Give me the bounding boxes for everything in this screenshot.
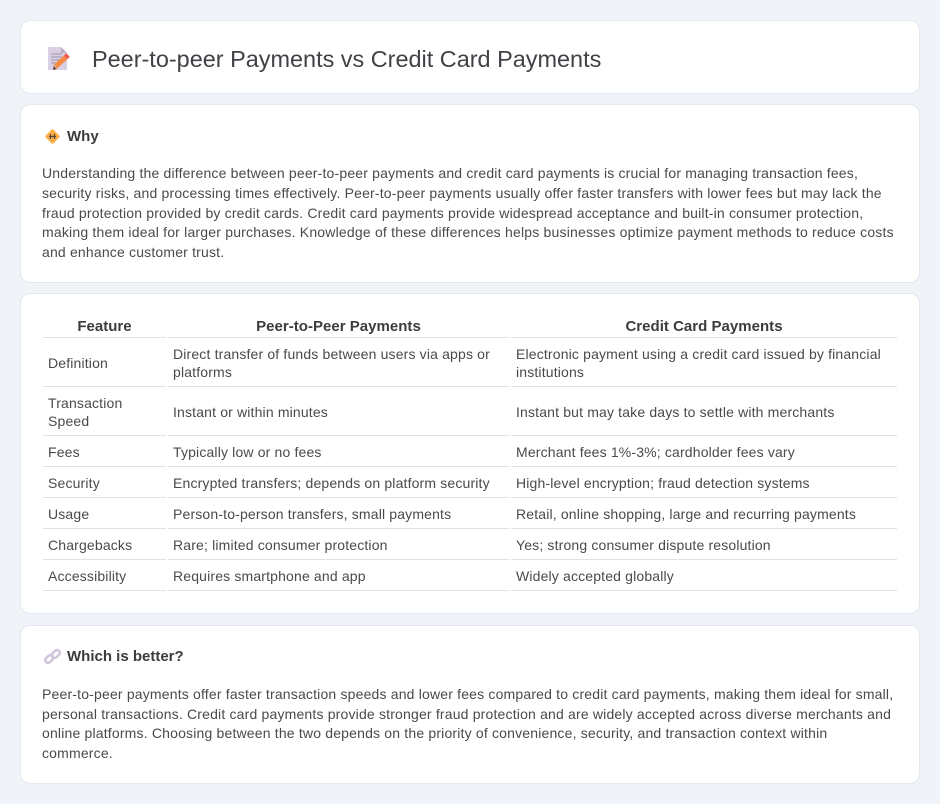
panel: comparison table bbox=[20, 293, 920, 614]
row: definition: Electronic payment using a credit card issued by financial bbox=[516, 346, 881, 362]
icon: chain link bbox=[44, 648, 61, 664]
row: accessibility: Requires smartphone and app bbox=[173, 568, 366, 584]
text block: which is better paragraph: online platforms. Choosing between the two depends on the priority of convenience, security, and transaction context within bbox=[42, 725, 827, 741]
heading: why: Why bbox=[67, 128, 99, 145]
text block: why paragraph bbox=[42, 165, 894, 260]
row: transaction speed: Instant but may take days to settle with merchants bbox=[516, 404, 834, 420]
icon: document with pencil bbox=[48, 47, 70, 70]
text block: which is better paragraph: personal transactions. Credit card payments provide stronger fraud protection and are widely accepted across diverse merchants and bbox=[42, 706, 891, 722]
text block: why paragraph: fraud protection provided by credit cards. Credit card payments provide widespread acceptance and built-in consumer protection, bbox=[42, 205, 863, 221]
row: fees: Merchant fees 1%-3%; cardholder fees vary bbox=[516, 444, 795, 460]
row: security: High-level encryption; fraud detection systems bbox=[516, 475, 810, 491]
table header: credit card payments: Credit Card Payments bbox=[625, 318, 783, 335]
row: security: Security bbox=[48, 475, 100, 491]
row: usage: Usage bbox=[48, 506, 89, 522]
row: transaction speed: Instant or within minutes bbox=[173, 404, 328, 420]
table header: peer-to-peer payments: Peer-to-Peer Payments bbox=[256, 318, 421, 335]
row: chargebacks: Rare; limited consumer protection bbox=[173, 537, 388, 553]
row: security: Encrypted transfers; depends on platform security bbox=[173, 475, 490, 491]
row: accessibility: Widely accepted globally bbox=[516, 568, 674, 584]
panel: which is better bbox=[20, 625, 920, 784]
row: accessibility: Accessibility bbox=[48, 568, 126, 584]
text block: which is better paragraph: Peer-to-peer payments offer faster transaction speeds and lower fees compared to credit card payments, making them ideal for small, bbox=[42, 686, 893, 702]
row: security bbox=[43, 475, 897, 498]
table header: peer-to-peer payments bbox=[168, 318, 509, 338]
row: chargebacks bbox=[43, 537, 897, 560]
heading: which is better: Which is better? bbox=[67, 648, 184, 665]
text block: which is better paragraph: commerce. bbox=[42, 745, 113, 761]
text block: which is better paragraph bbox=[42, 686, 893, 761]
row: usage: Person-to-person transfers, small payments bbox=[173, 506, 451, 522]
row: usage: Retail, online shopping, large and recurring payments bbox=[516, 506, 856, 522]
row: chargebacks: Chargebacks bbox=[48, 537, 132, 553]
icon: warning diamond bbox=[45, 129, 60, 144]
table header: feature bbox=[43, 318, 166, 338]
row: definition: institutions bbox=[516, 364, 584, 380]
row: usage bbox=[43, 506, 897, 529]
text block: why paragraph: Understanding the difference between peer-to-peer payments and credit card payments is crucial for managing transaction fees, bbox=[42, 165, 858, 181]
row: definition: Direct transfer of funds between users via apps or bbox=[173, 346, 490, 362]
text block: why paragraph: and enhance customer trust. bbox=[42, 244, 224, 260]
row: definition: platforms bbox=[173, 364, 232, 380]
title: Peer-to-peer Payments vs Credit Card Payments bbox=[92, 46, 601, 72]
row: transaction speed: Speed bbox=[48, 413, 89, 429]
row: fees: Typically low or no fees bbox=[173, 444, 322, 460]
row: accessibility bbox=[43, 568, 897, 591]
row: transaction speed: Transaction bbox=[48, 395, 122, 411]
row: fees: Fees bbox=[48, 444, 80, 460]
text block: why paragraph: security risks, and processing times effectively. Peer-to-peer payments usually offer faster transfers with lower fees but may lack the bbox=[42, 185, 882, 201]
row: chargebacks: Yes; strong consumer dispute resolution bbox=[516, 537, 771, 553]
text block: why paragraph: making them ideal for larger purchases. Knowledge of these differences helps businesses optimize payment methods to reduce costs bbox=[42, 224, 894, 240]
row: definition: Definition bbox=[48, 355, 108, 371]
table header: credit card payments bbox=[511, 318, 897, 338]
row: transaction speed bbox=[43, 395, 897, 436]
table header: feature: Feature bbox=[77, 318, 132, 335]
panel: why bbox=[20, 104, 920, 283]
panel: title card bbox=[20, 20, 920, 94]
row: definition bbox=[43, 346, 897, 387]
row: fees bbox=[43, 444, 897, 467]
